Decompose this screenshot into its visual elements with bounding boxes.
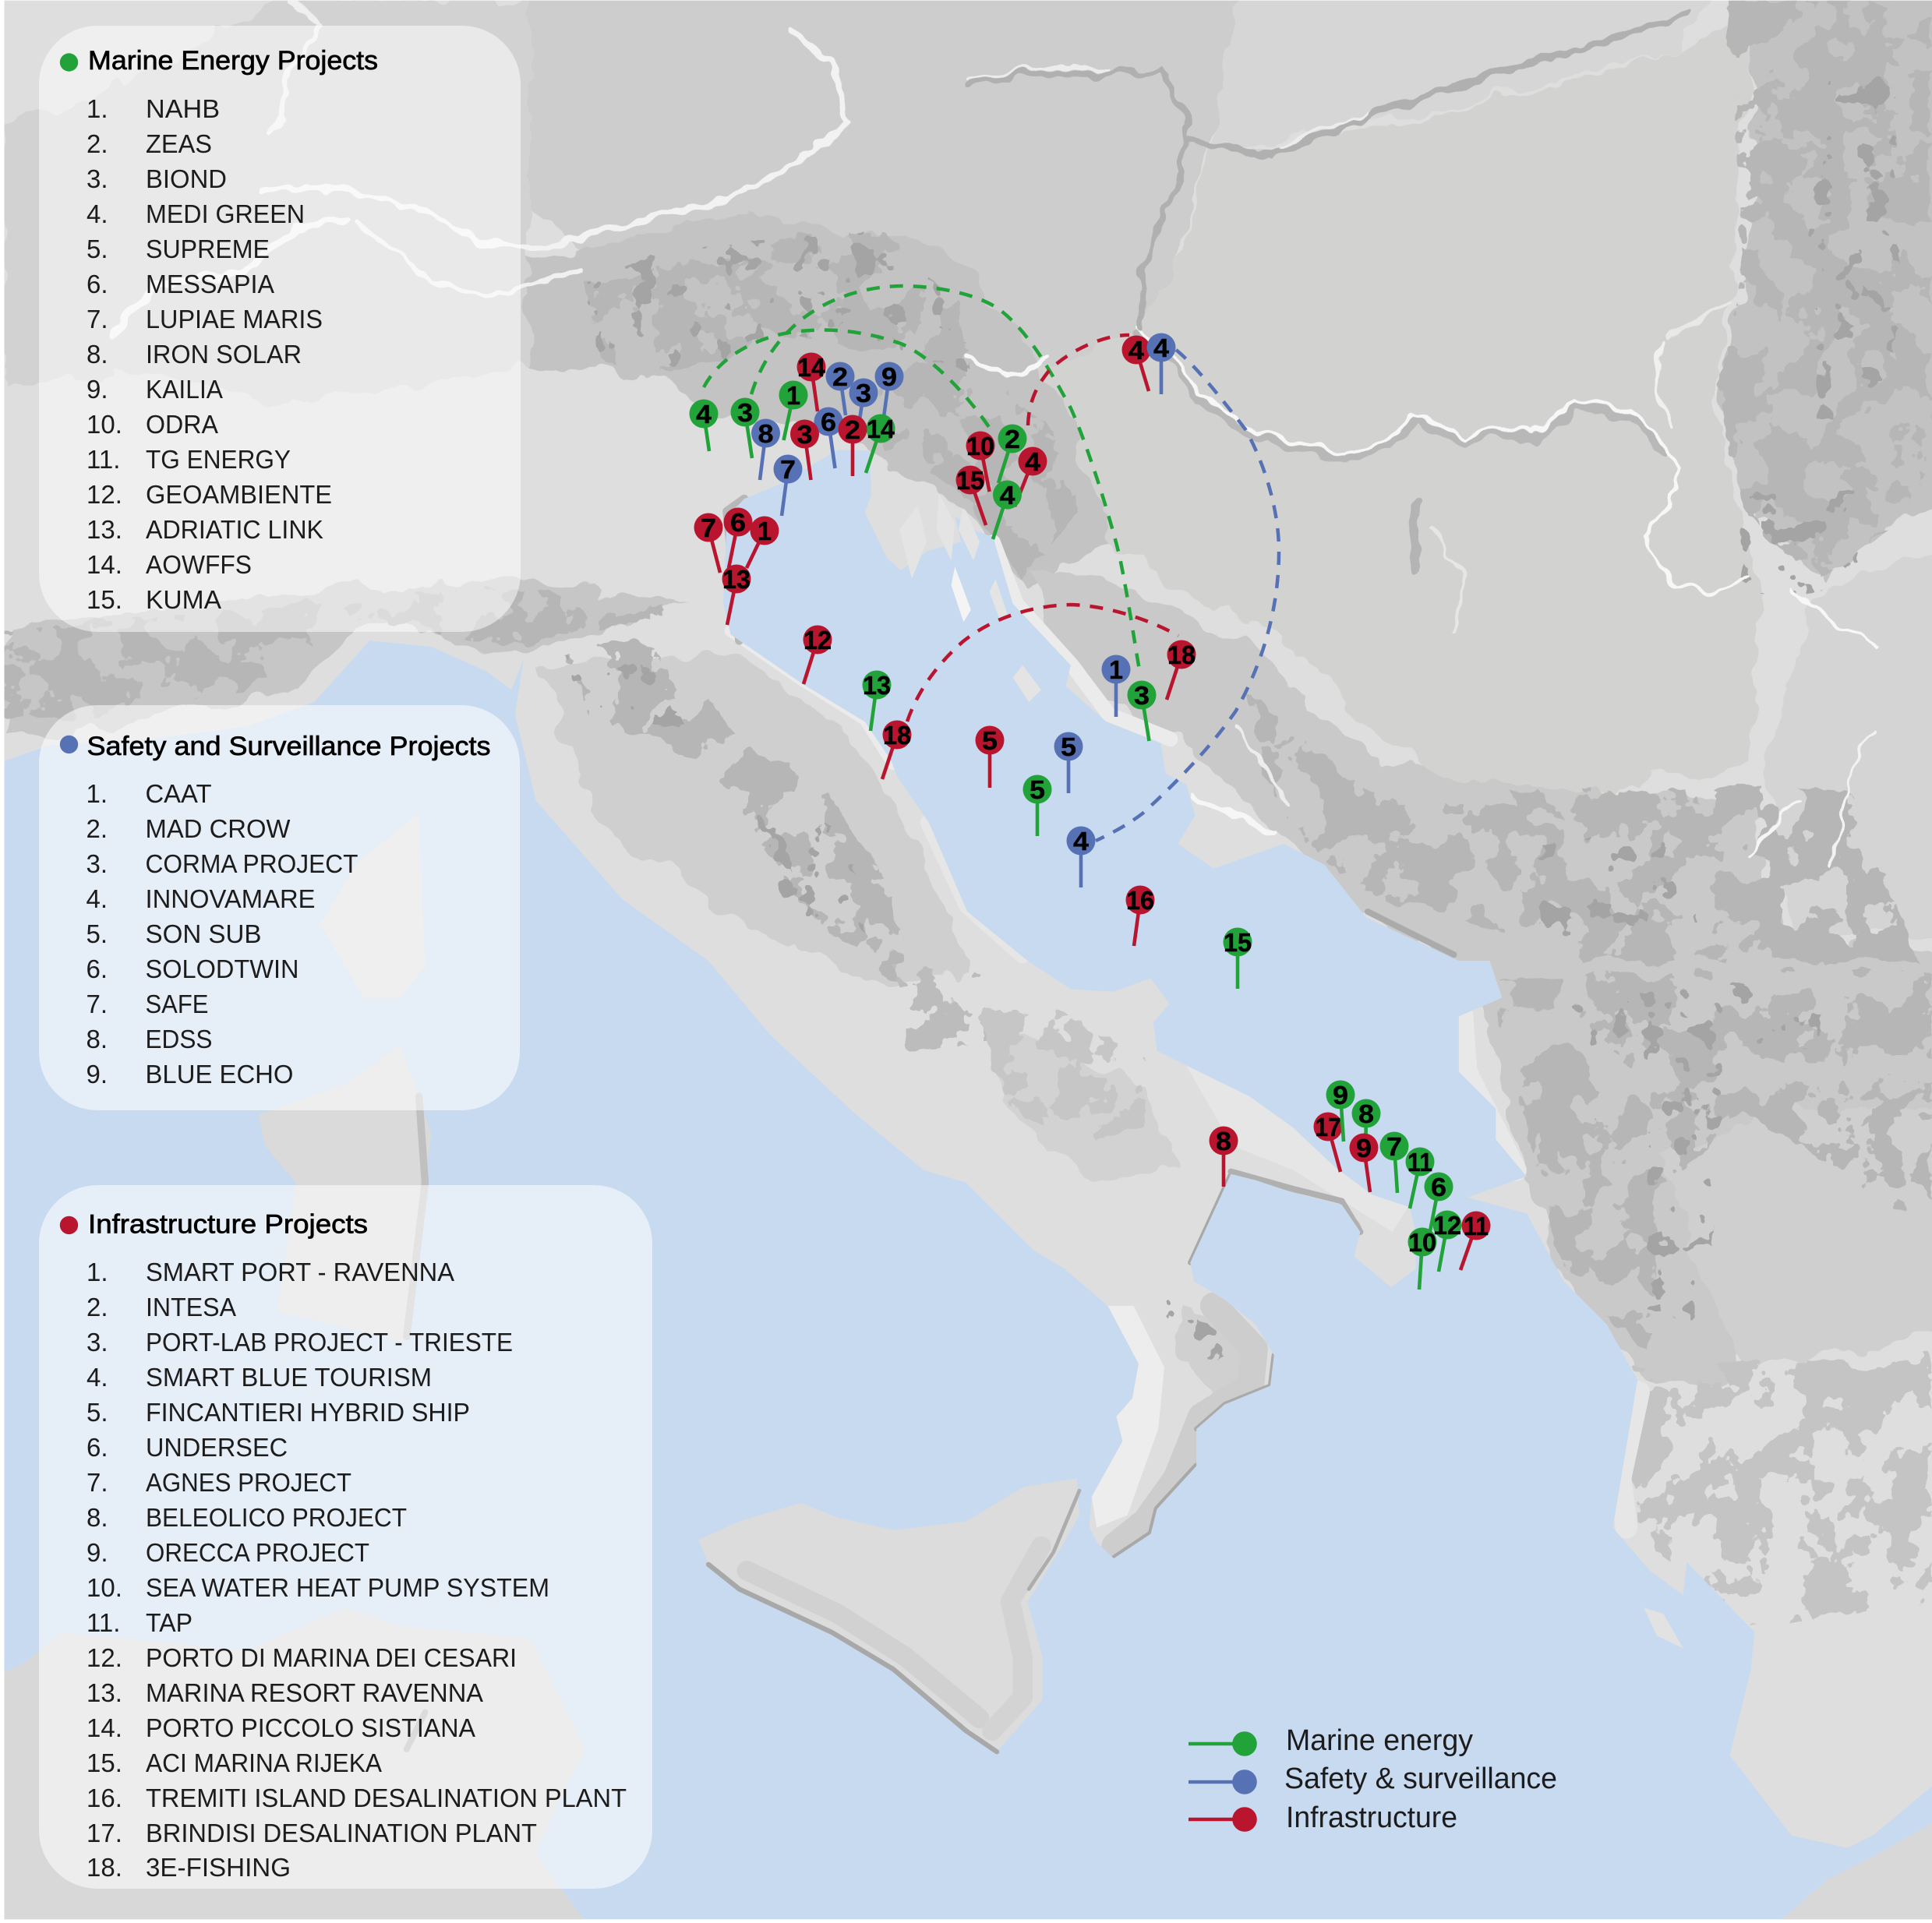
list: marine energy: 10. [87, 410, 122, 439]
pin: marine energy 7 [1379, 1131, 1409, 1193]
mountains: dark patches [567, 74, 1904, 1367]
pin: safety 5 [1054, 732, 1083, 793]
list: marine energy: KUMA [146, 585, 221, 614]
list: infrastructure: BELEOLICO PROJECT [146, 1503, 407, 1532]
pin: marine energy 7: 7 [1386, 1132, 1402, 1161]
list: marine energy: 7. [87, 305, 108, 333]
list: safety and surveillance: EDSS [145, 1025, 212, 1053]
list: marine energy: MEDI GREEN [146, 199, 305, 228]
list: marine energy: NAHB [146, 94, 220, 123]
list: marine energy: 8. [87, 340, 108, 369]
pin: infrastructure 4 north: 4 [1128, 336, 1145, 365]
pin: infrastructure 17: 17 [1316, 1113, 1340, 1141]
list: marine energy: LUPIAE MARIS [146, 305, 323, 333]
heading: Infrastructure Projects [88, 1209, 368, 1239]
list: infrastructure: 1. [87, 1258, 108, 1286]
pin: marine energy 14 [866, 415, 895, 473]
list: infrastructure: ORECCA PROJECT [146, 1538, 369, 1567]
list: infrastructure: TREMITI ISLAND DESALINATION PLANT [146, 1784, 627, 1812]
pin: marine energy 5: 5 [1030, 775, 1045, 804]
pin: infrastructure 18 west: 18 [883, 721, 911, 750]
list: infrastructure: 14. [87, 1713, 122, 1742]
list: marine energy: 13. [87, 515, 122, 544]
pin: marine energy 9: 9 [1333, 1081, 1348, 1110]
list: marine energy: 2. [87, 129, 108, 158]
list: infrastructure: 16. [87, 1784, 122, 1812]
list: infrastructure: BRINDISI DESALINATION PLANT [146, 1819, 537, 1847]
list: infrastructure [87, 1258, 627, 1882]
list: marine energy: GEOAMBIENTE [146, 480, 332, 509]
pin: infrastructure 2: 2 [845, 415, 860, 444]
list: safety and surveillance: 6. [86, 954, 108, 983]
pin: marine energy 14: 14 [867, 415, 895, 443]
pin: marine energy 4 west [689, 399, 719, 451]
list: safety and surveillance [86, 779, 358, 1089]
list: marine energy [87, 94, 332, 614]
list: infrastructure: UNDERSEC [146, 1433, 288, 1462]
pin: infrastructure 18 east: 18 [1167, 640, 1196, 669]
list: infrastructure: 17. [87, 1819, 122, 1847]
list: safety and surveillance: BLUE ECHO [145, 1060, 293, 1089]
pin: marine energy 10: 10 [1408, 1228, 1436, 1257]
pin: marine energy 11 [1406, 1147, 1434, 1208]
pin: infrastructure 7: 7 [701, 513, 716, 542]
pin: infrastructure 1: 1 [758, 517, 772, 545]
list: marine energy: 11. [87, 445, 120, 474]
pin: infrastructure 11 [1460, 1211, 1490, 1270]
pin: marine energy 12: 12 [1433, 1211, 1461, 1240]
pin: safety 1: 1 [1109, 655, 1123, 684]
pin: safety 6: 6 [821, 408, 836, 436]
arc: marine energy link 4 [704, 330, 991, 429]
list: infrastructure: SEA WATER HEAT PUMP SYSTEM [146, 1573, 549, 1602]
list: infrastructure: SMART PORT - RAVENNA [146, 1258, 454, 1286]
pin: safety 4 south [1066, 826, 1096, 887]
island: southern Greek land [1779, 1823, 1932, 1921]
pin: safety 1 [1102, 655, 1130, 717]
icon: red dot [60, 1216, 78, 1234]
list: safety and surveillance: SAFE [145, 990, 209, 1018]
pin: infrastructure 9: 9 [1356, 1134, 1372, 1163]
list: marine energy: ADRIATIC LINK [146, 515, 323, 544]
list: infrastructure: 6. [87, 1433, 108, 1462]
heading: Safety and Surveillance Projects [87, 732, 491, 761]
list: marine energy: 14. [87, 550, 122, 579]
legend item: infrastructure [1189, 1801, 1457, 1834]
pin: infrastructure 12: 12 [804, 626, 832, 655]
pin: safety 5: 5 [1061, 732, 1076, 761]
list: marine energy: TG ENERGY [146, 445, 291, 474]
pin: safety 4 north [1147, 333, 1175, 394]
list: infrastructure: PORTO PICCOLO SISTIANA [146, 1713, 475, 1742]
list: infrastructure: MARINA RESORT RAVENNA [146, 1678, 483, 1707]
pin: infrastructure 14 [796, 352, 826, 411]
pin: infrastructure 9 [1350, 1133, 1378, 1192]
list: safety and surveillance: 1. [86, 779, 108, 808]
pin: marine energy 4 Croatia [993, 480, 1022, 539]
panel background [39, 26, 521, 632]
island: Corsica [320, 813, 425, 998]
list: infrastructure: FINCANTIERI HYBRID SHIP [146, 1398, 470, 1427]
list: safety and surveillance: 9. [86, 1060, 108, 1089]
legend [1189, 1724, 1557, 1834]
coast: light strips [731, 542, 1639, 1546]
list: infrastructure: ACI MARINA RIJEKA [146, 1748, 382, 1777]
list: infrastructure: 8. [87, 1503, 108, 1532]
pin: infrastructure 10: 10 [966, 432, 994, 460]
arc: infrastructure link 4 [1028, 335, 1129, 425]
pin: infrastructure 18 east [1167, 640, 1196, 700]
pin: marine energy 13 [862, 670, 892, 731]
map pins [689, 333, 1490, 1290]
pin: infrastructure 13: 13 [722, 565, 751, 594]
list: infrastructure: 9. [87, 1538, 108, 1567]
list: infrastructure: 18. [87, 1853, 122, 1882]
pin: safety 8 [751, 419, 780, 480]
coast: shadow lines [727, 486, 1360, 1558]
icon: blue dot [60, 736, 78, 753]
list: safety and surveillance: INNOVAMARE [145, 884, 315, 913]
list: infrastructure: 11. [87, 1608, 120, 1637]
list: marine energy: 12. [87, 480, 122, 509]
rivers [111, 0, 1877, 863]
pin: infrastructure 8 [1210, 1127, 1238, 1187]
list: infrastructure: PORTO DI MARINA DEI CESARI [146, 1643, 517, 1672]
Sicily shading [407, 1096, 1079, 1752]
pin: infrastructure 2 [839, 415, 867, 476]
list: marine energy: 5. [87, 235, 108, 263]
pin: infrastructure 13 [722, 564, 751, 625]
list: marine energy: 9. [87, 375, 108, 404]
pin: safety 2 [826, 362, 854, 415]
list: infrastructure: PORT-LAB PROJECT - TRIESTE [146, 1328, 513, 1357]
pin: safety 8: 8 [758, 419, 773, 448]
pin: marine energy 3 west [731, 397, 759, 458]
list: safety and surveillance: 4. [86, 884, 108, 913]
pin: marine energy 3 east: 3 [1134, 681, 1150, 710]
legend item: marine energy: Marine energy [1286, 1724, 1473, 1757]
pin: infrastructure 8: 8 [1216, 1127, 1231, 1156]
pin: safety 3: 3 [856, 379, 871, 408]
pin: infrastructure 11: 11 [1464, 1212, 1489, 1240]
panel background [39, 1185, 652, 1889]
pin: marine energy 8: 8 [1358, 1099, 1374, 1128]
panel: safety and surveillance projects [39, 705, 520, 1110]
panel background [39, 705, 520, 1110]
list: safety and surveillance: 8. [86, 1025, 108, 1053]
pin: infrastructure 1 [747, 516, 779, 568]
pin: marine energy 5 [1023, 774, 1052, 836]
pin: safety 7 [773, 455, 803, 516]
pin: safety 4 south: 4 [1073, 827, 1090, 856]
pin: infrastructure 4 north [1122, 335, 1150, 391]
islands: Kvarner and Dalmatian [909, 520, 1041, 702]
pin: marine energy 2 [998, 424, 1027, 483]
list: infrastructure: 7. [87, 1468, 108, 1497]
list: infrastructure: 2. [87, 1293, 108, 1321]
list: marine energy: ODRA [146, 410, 218, 439]
pin: infrastructure 17 [1314, 1113, 1342, 1172]
list: safety and surveillance: 5. [86, 919, 108, 948]
list: safety and surveillance: MAD CROW [145, 814, 291, 843]
list: infrastructure: 12. [87, 1643, 122, 1672]
list: marine energy: IRON SOLAR [146, 340, 302, 369]
arc: marine energy link 3 [751, 286, 1140, 675]
pin: marine energy 13: 13 [863, 671, 891, 700]
pin: infrastructure 14: 14 [797, 353, 826, 382]
pin: marine energy 3 west: 3 [737, 398, 753, 427]
pin: marine energy 11: 11 [1407, 1148, 1432, 1177]
pin: safety 6 [814, 407, 843, 468]
list: marine energy: 15. [87, 585, 122, 614]
pin: infrastructure 5 [976, 726, 1004, 788]
list: marine energy: ZEAS [146, 129, 212, 158]
pin: safety 9 [874, 362, 904, 429]
list: infrastructure: AGNES PROJECT [146, 1468, 351, 1497]
list: safety and surveillance: 7. [86, 990, 108, 1018]
list: safety and surveillance: CAAT [145, 779, 212, 808]
pin: safety 4 north: 4 [1153, 333, 1170, 362]
list: infrastructure: 10. [87, 1573, 122, 1602]
pin: marine energy 15 [1224, 927, 1252, 989]
pin: safety 3 [849, 379, 878, 436]
list: marine energy: 3. [87, 164, 108, 193]
list: infrastructure: TAP [146, 1608, 192, 1637]
icon: green dot [60, 53, 78, 72]
list: infrastructure: 4. [87, 1363, 108, 1392]
list: marine energy: 1. [87, 94, 108, 123]
pin: infrastructure 3 [790, 419, 819, 480]
pin: marine energy 10 [1407, 1228, 1437, 1290]
pin: marine energy 6 [1425, 1172, 1453, 1231]
panel: marine energy projects [39, 26, 521, 632]
list: marine energy: 4. [87, 199, 108, 228]
legend item: infrastructure: Infrastructure [1286, 1801, 1457, 1834]
pin: infrastructure 10 [966, 432, 994, 492]
list: infrastructure: 3E-FISHING [146, 1853, 291, 1882]
panel: infrastructure projects [39, 1185, 652, 1889]
heading: Marine Energy Projects [88, 46, 378, 76]
list: infrastructure: 5. [87, 1398, 108, 1427]
list: marine energy: BIOND [146, 164, 227, 193]
pin: infrastructure 18 west [882, 720, 912, 779]
pin: infrastructure 16: 16 [1126, 886, 1154, 915]
list: safety and surveillance: SON SUB [145, 919, 262, 948]
pin: safety 9: 9 [881, 362, 897, 391]
list: infrastructure: 15. [87, 1748, 122, 1777]
legend item: marine energy [1189, 1724, 1473, 1757]
list: safety and surveillance: CORMA PROJECT [145, 849, 358, 878]
list: safety and surveillance: 3. [86, 849, 108, 878]
pin: infrastructure 4 Rijeka: 4 [1025, 447, 1041, 476]
arc: safety link 4 [1096, 350, 1279, 841]
pin: marine energy 12 [1432, 1211, 1462, 1272]
legend item: safety and surveillance: Safety & surveillance [1284, 1762, 1557, 1795]
arc: infrastructure link 18 [907, 605, 1178, 722]
pin: infrastructure 15 [955, 466, 986, 525]
list: infrastructure: SMART BLUE TOURISM [146, 1363, 432, 1392]
pin: infrastructure 5: 5 [982, 726, 998, 755]
list: safety and surveillance: 2. [86, 814, 108, 843]
pin: marine energy 8 [1351, 1099, 1381, 1161]
pin: infrastructure 15: 15 [956, 466, 984, 495]
island: Sardinia [259, 1045, 431, 1343]
pin: marine energy 9 [1326, 1080, 1355, 1141]
pin: infrastructure 7 [694, 513, 723, 573]
list: safety and surveillance: SOLODTWIN [145, 954, 299, 983]
pin: marine energy 2: 2 [1005, 425, 1020, 453]
pin: safety 2: 2 [832, 362, 848, 391]
pin: infrastructure 6: 6 [730, 508, 746, 537]
list: infrastructure: 13. [87, 1678, 122, 1707]
list: infrastructure: 3. [87, 1328, 108, 1357]
pin: marine energy 3 east [1127, 681, 1157, 741]
land: North Africa [2, 1607, 585, 1921]
pin: marine energy 1 [779, 380, 807, 440]
island: Sicily [698, 1478, 1079, 1752]
pin: marine energy 1: 1 [786, 381, 800, 410]
pin: infrastructure 6 [723, 508, 753, 568]
pin: infrastructure 16 [1125, 885, 1155, 946]
pin: infrastructure 4 Rijeka [1015, 447, 1047, 506]
pin: marine energy 6: 6 [1431, 1173, 1446, 1201]
pin: marine energy 4 Croatia: 4 [999, 481, 1015, 510]
pin: safety 7: 7 [780, 455, 796, 484]
list: marine energy: KAILIA [146, 375, 223, 404]
list: marine energy: 6. [87, 270, 108, 298]
pin: infrastructure 3: 3 [796, 420, 812, 449]
list: marine energy: SUPREME [146, 235, 270, 263]
pin: marine energy 15: 15 [1224, 928, 1252, 957]
pin: infrastructure 12 [803, 625, 832, 684]
list: infrastructure: INTESA [146, 1293, 236, 1321]
pin: marine energy 4 west: 4 [696, 400, 712, 429]
island: Ionian [1644, 1607, 1683, 1648]
list: marine energy: MESSAPIA [146, 270, 274, 298]
list: marine energy: AOWFFS [146, 550, 252, 579]
